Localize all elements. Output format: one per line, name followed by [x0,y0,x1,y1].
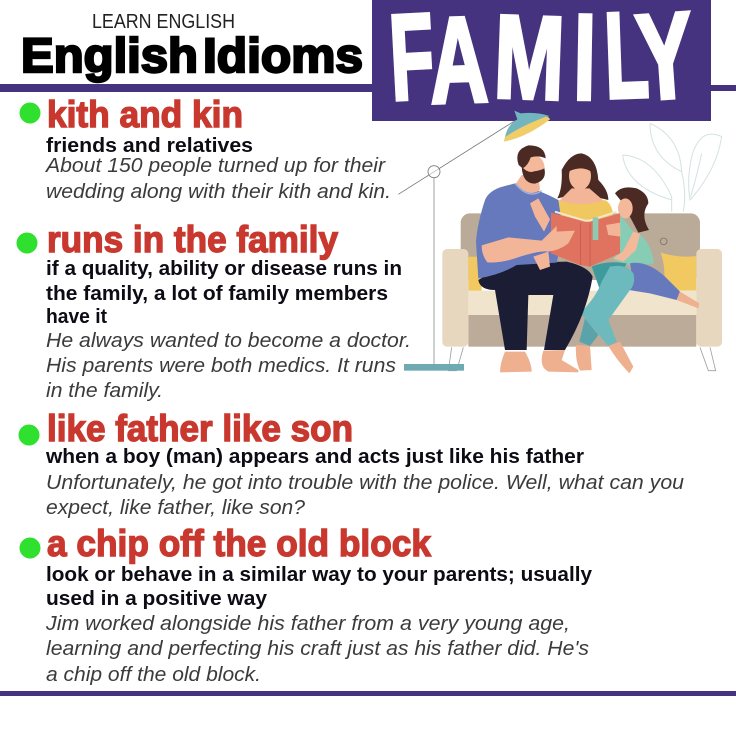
definition: have it [46,306,107,328]
girl [613,187,699,308]
example [45,155,391,203]
example: wedding along with their kith and kin. [46,181,391,203]
bullet [20,102,40,124]
example [45,613,589,686]
example: expect, like father, like son? [46,497,306,519]
definition [46,258,402,328]
open book [551,212,620,267]
definition [46,564,593,610]
man [476,145,593,372]
definition: friends and relatives [46,135,253,157]
definition: the family, a lot of family members [46,283,388,305]
woman legs [576,262,634,373]
example: About 150 people turned up for their [45,155,386,177]
definition: look or behave in a similar way to your parents; usually [46,564,593,586]
footer rule [0,691,736,696]
idiom 3: like father like son [18,408,684,519]
idiom heading: kith and kin [47,94,243,135]
example: a chip off the old block. [46,664,261,686]
example [46,330,411,402]
kicker: learn english: LEARN ENGLISH [92,11,235,33]
definition: used in a positive way [46,588,268,610]
idiom 1: kith and kin [20,94,391,203]
example: Jim worked alongside his father from a very young age, [45,613,570,635]
definition: when a boy (man) appears and acts just like his father [45,446,584,468]
definition: if a quality, ability or disease runs in [46,258,402,280]
plant line art [623,123,722,212]
hands on book [482,223,621,270]
title: English Idioms [21,30,363,83]
title banner: FAMILY [372,0,711,129]
example [46,472,684,519]
example: He always wanted to become a doctor. [46,330,411,352]
idiom heading: like father like son [47,408,353,449]
example: His parents were both medics. It runs [46,355,396,377]
bullet [20,538,40,558]
idiom 4: a chip off the old block [20,523,593,686]
idiom heading: a chip off the old block [47,523,431,564]
example: in the family. [46,380,163,402]
bullet [16,232,38,254]
bullet [18,424,40,446]
example: learning and perfecting his craft just as his father did. He's [46,638,589,660]
idiom 2: runs in the family [16,219,411,402]
sofa [442,213,722,371]
header rule [0,84,736,92]
title: English Idioms: Idioms [203,30,363,83]
idiom heading: runs in the family [47,219,338,260]
example: Unfortunately, he got into trouble with the police. Well, what can you [46,472,684,494]
title: English Idioms: English [21,30,198,83]
illustration: family reading on sofa [398,111,722,373]
floor lamp [398,111,550,371]
woman [548,153,613,225]
